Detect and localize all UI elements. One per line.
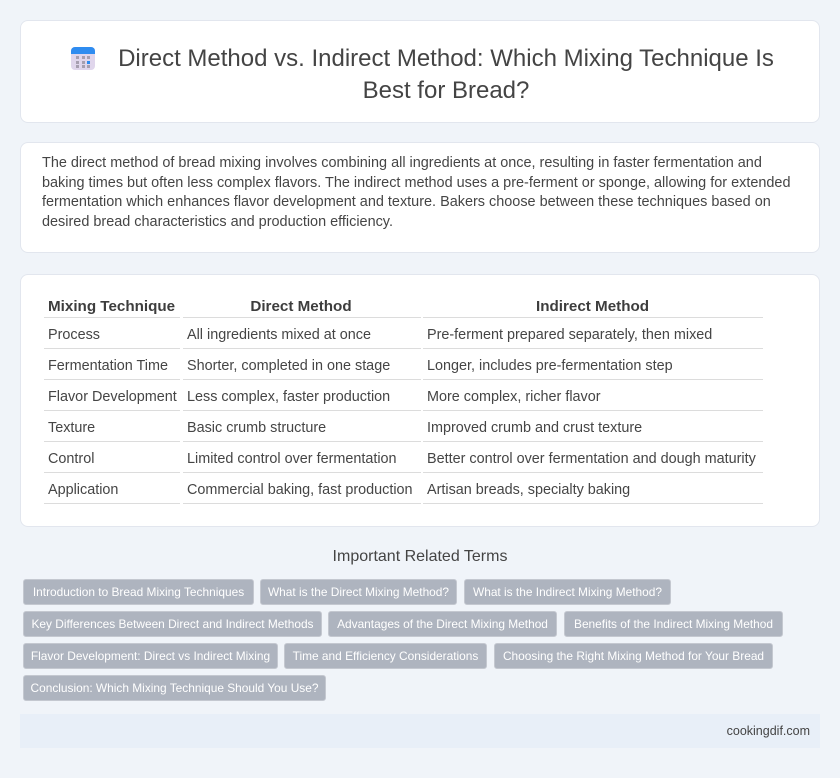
table: comparison: Process [48,327,100,343]
table: comparison: Improved crumb and crust texture [427,420,642,436]
table: comparison: Application [48,482,118,498]
tags: related terms: Conclusion: Which Mixing Technique Should You Use? [30,681,318,695]
text: introduction paragraph: baking times but often less complex flavors. The indirect method uses a pre-ferment or sponge, allowing for extended [42,175,790,191]
heading: related terms: Important Related Terms [333,548,507,565]
footer: source: cookingdif.com [727,724,810,738]
table: comparison: Pre-ferment prepared separately, then mixed [427,327,712,343]
table: comparison: Texture [48,420,95,436]
tags: related terms: Time and Efficiency Considerations [293,649,478,663]
text: introduction paragraph: The direct method of bread mixing involves combining all ingredients at once, resulting in faster fermentation and [42,155,762,171]
tags: related terms: What is the Direct Mixing Method? [268,585,449,599]
panel: comparison table [20,274,820,527]
tags: related terms: What is the Indirect Mixing Method? [473,585,662,599]
tags: related terms: Introduction to Bread Mixing Techniques [33,585,244,599]
tags: related terms: Choosing the Right Mixing Method for Your Bread [503,649,764,663]
icon: calendar [71,47,95,70]
footer bar [20,714,820,748]
tags: related terms [23,579,783,701]
table: comparison: Limited control over fermentation [187,451,397,467]
table: comparison [44,298,763,504]
table: comparison: Better control over fermentation and dough maturity [427,451,756,467]
title: Direct Method vs. Indirect Method: Which Mixing Technique Is Best for Bread? [118,45,774,104]
table: comparison: Mixing Technique [48,298,175,315]
tags: related terms: Benefits of the Indirect Mixing Method [574,617,773,631]
table: comparison: Indirect Method [536,298,649,315]
table: comparison: Control [48,451,94,467]
table: comparison: Basic crumb structure [187,420,326,436]
table: comparison: Commercial baking, fast production [187,482,413,498]
text: introduction paragraph: fermentation which enhances flavor development and texture. Bakers choose between these techniques based on [42,194,771,210]
table: comparison: More complex, richer flavor [427,389,601,405]
text: introduction paragraph [42,155,790,230]
table: comparison: All ingredients mixed at once [187,327,371,343]
table: comparison: Shorter, completed in one stage [187,358,390,374]
tags: related terms: Key Differences Between Direct and Indirect Methods [32,617,314,631]
table: comparison: Flavor Development [48,389,177,405]
table: comparison: Less complex, faster production [187,389,390,405]
tags: related terms: Advantages of the Direct Mixing Method [337,617,548,631]
panel: title header [20,20,820,123]
table: comparison: Longer, includes pre-fermentation step [427,358,673,374]
panel: introduction [20,142,820,253]
table: comparison: Artisan breads, specialty baking [427,482,630,498]
tags: related terms: Flavor Development: Direct vs Indirect Mixing [31,649,270,663]
table: comparison: Fermentation Time [48,358,168,374]
table: comparison: Direct Method [250,298,352,315]
text: introduction paragraph: desired bread characteristics and production efficiency. [42,214,393,230]
